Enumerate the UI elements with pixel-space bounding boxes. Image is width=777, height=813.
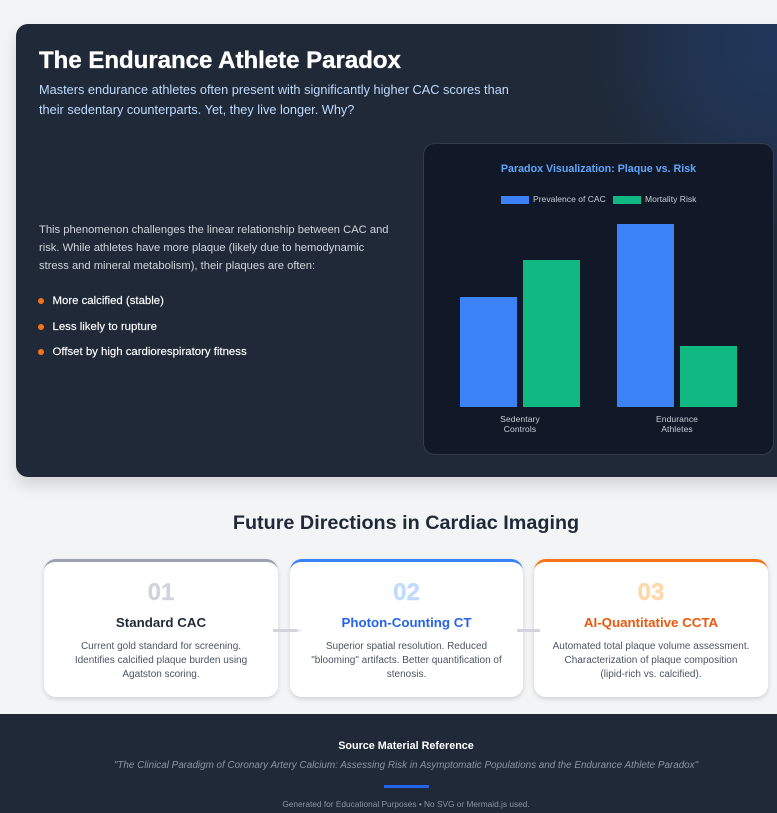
legend: Mortality Risk: [645, 194, 696, 204]
card: standard CAC: [44, 559, 278, 697]
intro text: Masters endurance athletes often present with significantly higher CAC scores than: [39, 82, 509, 97]
legend: prevalence of CAC: [501, 194, 606, 204]
number 02: 02: [393, 579, 420, 606]
accent line: [384, 785, 429, 788]
card title: AI-Quantitative CCTA: [584, 615, 718, 630]
card text: [75, 641, 247, 680]
axis label: endurance athletes: [656, 414, 698, 434]
explanatory text: risk. While athletes have more plaque (likely due to hemodynamic: [39, 242, 364, 254]
card text: Current gold standard for screening.: [81, 641, 241, 652]
card text: Superior spatial resolution. Reduced: [326, 641, 487, 652]
panel: endurance athlete paradox: [16, 24, 777, 477]
bullet: less likely to rupture: Less likely to rupture: [52, 321, 157, 333]
card text: "blooming" artifacts. Better quantification of: [311, 655, 502, 666]
footer: [0, 714, 777, 813]
card text: (lipid-rich vs. calcified).: [600, 669, 702, 680]
footer heading: Source Material Reference: [338, 740, 474, 752]
bar: athletes mortality: [680, 346, 737, 407]
axis label: endurance athletes: Endurance: [656, 414, 698, 424]
number 01: 01: [148, 579, 174, 606]
title: The Endurance Athlete Paradox: [39, 47, 401, 74]
card text: Identifies calcified plaque burden using: [75, 655, 247, 666]
legend: Prevalence of CAC: [533, 194, 606, 204]
intro text: [39, 82, 509, 117]
bullet list: [38, 295, 247, 358]
bullet: more calcified: More calcified (stable): [52, 295, 164, 307]
card title: Photon-Counting CT: [342, 615, 471, 630]
bullet: offset by fitness: Offset by high cardiorespiratory fitness: [52, 346, 247, 358]
panel: chart: [423, 143, 774, 455]
intro text: their sedentary counterparts. Yet, they live longer. Why?: [39, 102, 354, 117]
bar: sedentary CAC: [460, 297, 517, 407]
arrow: 02 to 03: [517, 629, 540, 632]
arrow: 01 to 02: [273, 629, 301, 632]
explanatory text: stress and mineral metabolism), their plaques are often:: [39, 260, 315, 272]
card text: Agatston scoring.: [122, 669, 200, 680]
axis label: sedentary controls: [500, 414, 540, 434]
axis label: sedentary controls: Sedentary: [500, 414, 540, 424]
number 03: 03: [638, 579, 664, 606]
card text: Automated total plaque volume assessment.: [553, 641, 749, 652]
axis label: sedentary controls: Controls: [504, 424, 536, 434]
explanatory text: [39, 224, 389, 272]
card text: [552, 641, 749, 680]
chart title: Paradox Visualization: Plaque vs. Risk: [501, 163, 696, 175]
footer note: Generated for Educational Purposes • No SVG or Mermaid.js used.: [282, 799, 530, 809]
card text: stenosis.: [387, 669, 426, 680]
card text: [311, 641, 502, 680]
background glow: [586, 0, 777, 234]
explanatory text: This phenomenon challenges the linear relationship between CAC and: [39, 224, 389, 236]
source citation: "The Clinical Paradigm of Coronary Artery Calcium: Assessing Risk in Asymptomatic Populations and the Endurance Athlete Paradox": [114, 760, 698, 771]
legend: [501, 194, 696, 204]
legend: mortality risk: [613, 194, 696, 204]
bar: athletes CAC: [617, 224, 674, 407]
card: photon-counting CT: [290, 559, 523, 697]
bar: sedentary mortality: [523, 260, 580, 407]
heading: future directions: Future Directions in Cardiac Imaging: [233, 512, 579, 534]
card: AI-quantitative CCTA: [534, 559, 768, 697]
card title: Standard CAC: [116, 615, 206, 630]
axis label: endurance athletes: Athletes: [661, 424, 693, 434]
bar chart: [460, 224, 737, 434]
card text: Characterization of plaque composition: [565, 655, 737, 666]
